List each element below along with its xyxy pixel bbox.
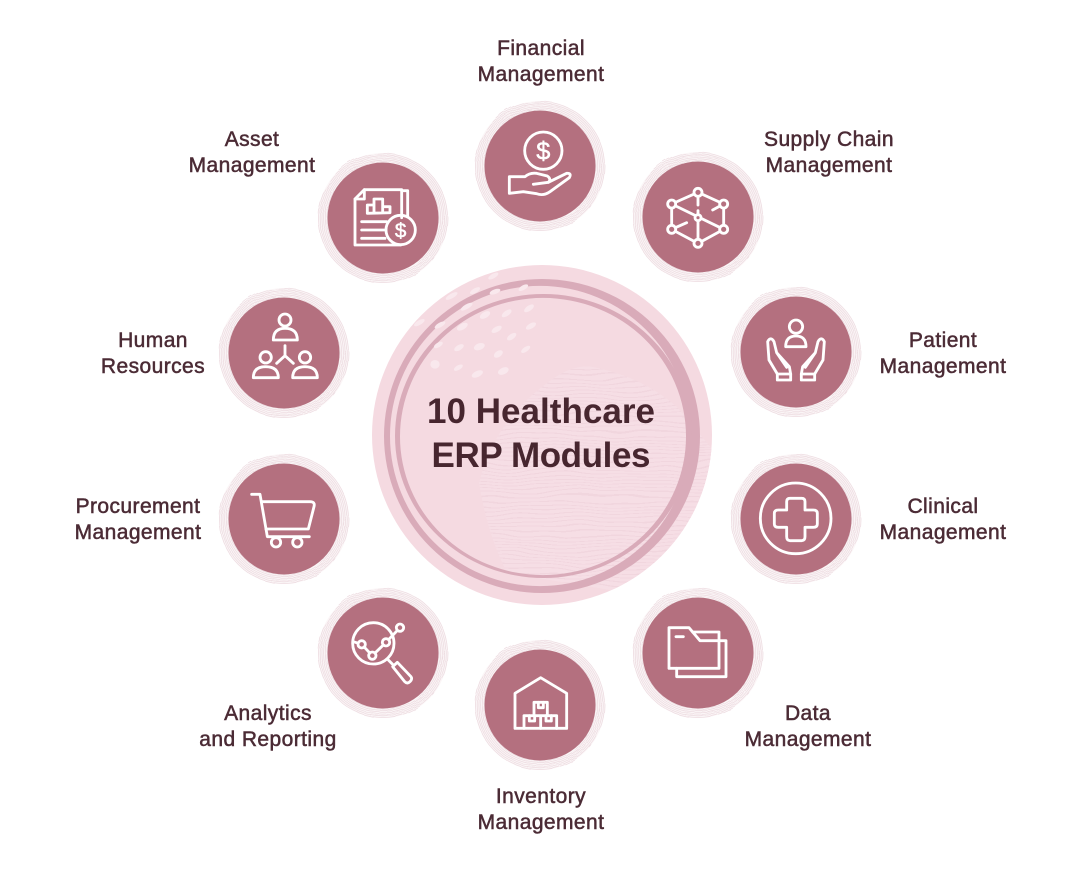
label: Management xyxy=(189,154,315,177)
label: Asset xyxy=(225,128,279,151)
module: Procurement Management xyxy=(75,454,349,584)
icon: people hierarchy xyxy=(253,314,317,378)
label: Analytics xyxy=(224,702,312,725)
label: Management xyxy=(766,154,892,177)
module: Inventory Management xyxy=(475,640,605,834)
icon: medical cross xyxy=(760,483,831,554)
label: Patient xyxy=(909,329,977,352)
module: Asset Management xyxy=(189,128,448,283)
module: Patient Management xyxy=(731,287,1006,417)
decorative dots xyxy=(413,271,537,379)
title: 10 Healthcare xyxy=(427,392,655,431)
icon: warehouse with boxes xyxy=(515,678,567,728)
label: Financial xyxy=(497,37,585,60)
icon: coin in hand: $ xyxy=(536,138,550,166)
icon: caring hands xyxy=(768,320,824,380)
central circle xyxy=(372,265,712,605)
icon: shopping cart xyxy=(252,494,314,547)
inner swoosh ring xyxy=(395,294,692,578)
label: Management xyxy=(880,355,1006,378)
icon: magnifier with trend line xyxy=(353,623,412,683)
label: Resources xyxy=(101,355,205,378)
label: Data xyxy=(785,702,831,725)
label: Management xyxy=(880,521,1006,544)
label: Inventory xyxy=(496,785,586,808)
icon: coin in hand xyxy=(509,132,570,195)
title: ERP Modules xyxy=(432,436,650,475)
module: Human Resources xyxy=(101,288,349,418)
label: Management xyxy=(745,728,871,751)
label: Human xyxy=(118,329,188,352)
icon: folders xyxy=(669,628,726,677)
module: Supply Chain Management xyxy=(633,128,894,282)
module: Data Management xyxy=(633,588,871,751)
module: Clinical Management xyxy=(731,454,1006,584)
icon: network cube xyxy=(668,188,728,247)
icon: report with coin xyxy=(355,190,415,245)
outer swoosh ring xyxy=(384,279,700,593)
icon: report with coin: $ xyxy=(395,220,407,243)
label: Procurement xyxy=(76,495,200,518)
label: and Reporting xyxy=(199,728,337,751)
label: Supply Chain xyxy=(764,128,894,151)
central disc xyxy=(372,265,712,605)
label: Management xyxy=(478,63,604,86)
contour texture xyxy=(617,450,712,588)
label: Clinical xyxy=(907,495,979,518)
module: Financial Management xyxy=(475,37,605,231)
label: Management xyxy=(75,521,201,544)
module: Analytics and Reporting xyxy=(199,588,448,751)
label: Management xyxy=(478,811,604,834)
